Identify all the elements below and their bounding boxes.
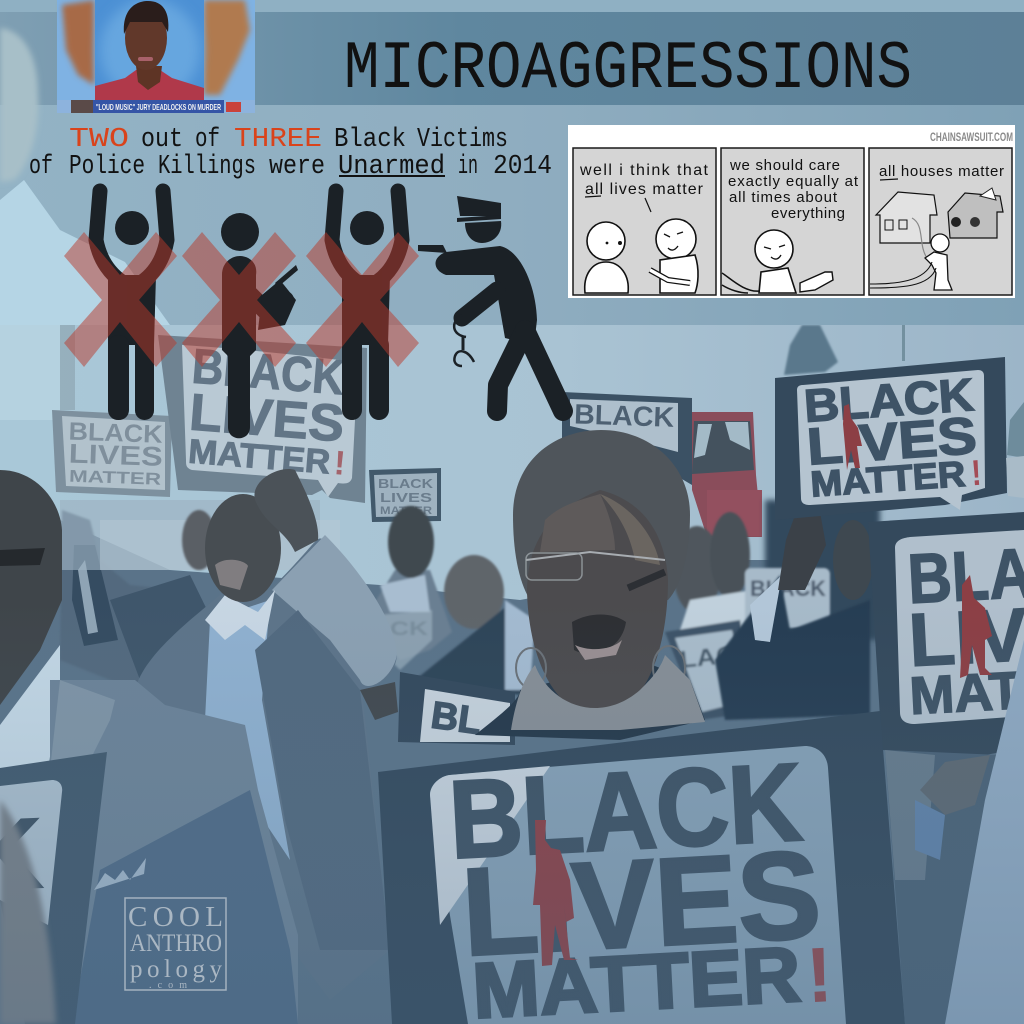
back sign middle <box>562 392 692 485</box>
statistic headline: of <box>29 152 53 182</box>
main sign in foreground: BLACK <box>447 741 805 882</box>
small back sign <box>369 468 441 522</box>
pictogram: police officer with gun and handcuffs <box>418 196 563 411</box>
sign centre-left: LIVES <box>187 384 346 454</box>
statistic headline: TWO <box>69 125 129 155</box>
news caption bar: "LOUD MUSIC" JURY DEADLOCKS ON MURDER <box>96 102 221 112</box>
upper right sign: MATTER <box>809 453 967 505</box>
comic panel two: we should care <box>729 157 840 174</box>
background people <box>182 506 830 720</box>
background tree and pole <box>784 325 1024 458</box>
red figure on sign <box>533 820 578 966</box>
upper translucent panel with faded man <box>0 0 1024 325</box>
woman speaking <box>475 430 705 740</box>
upper right sign <box>775 357 1007 520</box>
upper right sign: BLACK <box>802 368 976 432</box>
main sign in foreground <box>378 711 905 1024</box>
statistic headline: THREE <box>234 125 322 155</box>
red crosses over victims <box>64 232 419 367</box>
sign lower back: BL <box>429 695 484 743</box>
crowd mid-ground <box>0 500 1024 1024</box>
photo: news still of Jordan Davis <box>57 0 255 113</box>
lower right hand and pale foreground figure <box>885 640 1024 1024</box>
news caption bar <box>57 100 255 113</box>
comic panel one: all lives matter <box>585 181 704 198</box>
statistic headline: Police <box>69 152 145 182</box>
watermark: Cool Anthropology logo <box>125 898 226 991</box>
sign lower back <box>398 672 515 745</box>
statistic headline: Killings <box>158 152 256 182</box>
background people: LAC <box>679 641 737 674</box>
back sign middle: BLACK <box>574 398 675 433</box>
small back sign: BLACK <box>378 476 434 491</box>
upper right sign: LIVES <box>805 407 979 477</box>
sign centre-left: MATTER <box>187 433 332 482</box>
statistic headline: Unarmed <box>338 152 445 182</box>
comic panel two: all times about <box>729 189 838 206</box>
background people: BLACK <box>750 576 826 601</box>
watermark: Cool Anthropology logo: ANTHRO <box>130 930 222 957</box>
main sign in foreground: ! <box>804 930 835 1019</box>
small back sign: LIVES <box>380 490 432 505</box>
back sign left <box>52 410 172 497</box>
back sign left: BLACK <box>68 418 163 449</box>
handcuffs <box>454 315 474 366</box>
statistic headline: 2014 <box>493 152 552 182</box>
pictogram: victim three, hands up <box>332 191 402 420</box>
foreground left man in grey suit <box>0 470 298 1024</box>
comic strip: all lives matter <box>568 125 1015 298</box>
statistic headline: Black <box>334 125 406 155</box>
center man in suit <box>135 469 398 1000</box>
small back sign: MATTER <box>380 505 432 517</box>
sign centre-left <box>158 335 367 503</box>
sign centre-left: ! <box>333 444 347 483</box>
comic panel one: well i think that <box>579 162 709 179</box>
statistic headline: of <box>195 125 220 155</box>
background people: CK <box>390 619 428 640</box>
pictogram: victim one, hands up <box>96 191 167 420</box>
comic panel two: exactly equally at <box>728 173 859 190</box>
pictogram: victim two, holding phone <box>221 213 298 438</box>
edge sign far right <box>1006 456 1024 498</box>
watermark: Cool Anthropology logo: COOL <box>128 901 223 933</box>
watermark: Cool Anthropology logo: .com <box>149 980 187 991</box>
faded man on left, lower part <box>0 325 75 420</box>
upper right sign: ! <box>970 452 983 493</box>
statistic headline: out <box>141 125 183 155</box>
comic panel two: everything <box>771 205 845 222</box>
comic panel three <box>869 148 1012 295</box>
overall bottom tint <box>0 600 1024 1024</box>
comic panel two <box>721 148 864 295</box>
right sign: MAT <box>908 661 1023 726</box>
red bus <box>692 412 762 537</box>
statistic headline: were <box>269 152 325 182</box>
right sign <box>868 512 1024 755</box>
main sign in foreground: LIVES <box>459 826 824 982</box>
dark suited man raising arm on right <box>715 507 873 720</box>
foreground left sign <box>0 752 107 1024</box>
back sign left: MATTER <box>69 467 161 489</box>
statistic headline <box>29 125 552 182</box>
sign centre-left: BLACK <box>190 340 346 405</box>
sky <box>0 325 1024 585</box>
watermark: Cool Anthropology logo: pology <box>130 956 222 983</box>
back sign left: LIVES <box>68 439 163 472</box>
title: MICROAGGRESSIONS <box>344 31 912 108</box>
comic panel three: all houses matter <box>879 163 1004 180</box>
statistic headline: Victims <box>417 125 508 155</box>
statistic headline: in <box>458 152 478 182</box>
comic panel one <box>573 148 716 295</box>
